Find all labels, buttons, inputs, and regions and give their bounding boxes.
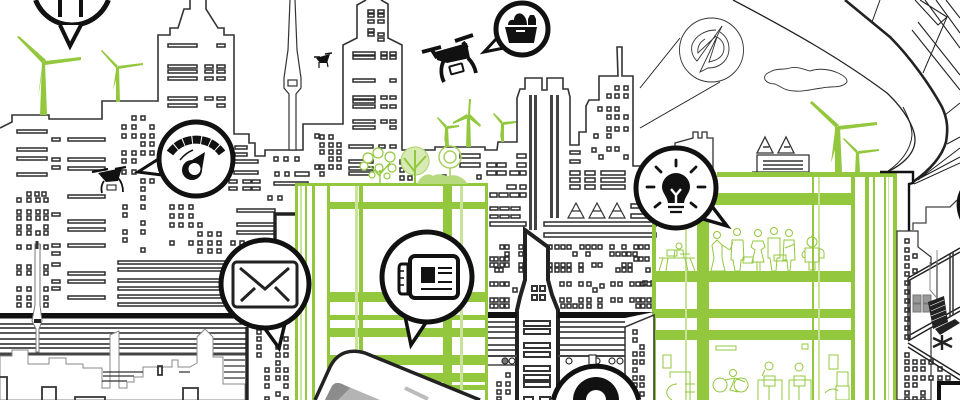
bubble: top left partial: [36, 0, 108, 46]
glass room: [908, 248, 960, 380]
tall tower in sky: [284, 0, 301, 150]
foreground white skyline: [0, 329, 245, 400]
thick building edge: [247, 214, 296, 400]
small square windows: [17, 86, 654, 400]
drone small gauge: [92, 167, 126, 193]
drone with package: [422, 35, 476, 82]
bubble: basket: [484, 3, 548, 55]
wide windows: [17, 10, 656, 306]
low-right building: [497, 315, 654, 400]
wind turbines: [17, 36, 879, 173]
green building two: [652, 172, 897, 400]
far right small buildings: [675, 132, 809, 173]
drone small top: [314, 53, 332, 68]
twin tower dark stripes: [529, 95, 559, 230]
bubble: newspaper: [382, 232, 472, 345]
flying disc light beam and curves: [640, 0, 960, 184]
lower building outlines: [0, 366, 198, 400]
tower pod: [288, 80, 297, 86]
black ground bars and stripes, right: [488, 312, 654, 365]
green line art office people: [659, 228, 849, 400]
bubble: lightbulb: [636, 148, 727, 228]
black ground bars and stripes, left: [0, 313, 246, 354]
twin tower stripes: [529, 95, 537, 200]
right side building: [880, 172, 960, 400]
green building one: [295, 183, 488, 400]
trees on roof: [360, 146, 468, 184]
foreground stripes behind white skyline: [102, 360, 245, 381]
left skyline outline: [0, 0, 640, 166]
triangle roof shapes: [568, 203, 625, 218]
office chair: [928, 296, 960, 350]
logo circle: [680, 18, 744, 82]
bubble: bottom circle: [553, 366, 639, 400]
smartphone: [315, 351, 480, 400]
bubble: envelope: [221, 240, 309, 348]
central skyscraper: [517, 230, 558, 400]
door frame: [939, 383, 960, 400]
cloud: [765, 67, 847, 91]
row of small circles: [502, 355, 623, 365]
bubble: gauge: [138, 122, 233, 196]
thin radio tower: [32, 241, 42, 352]
